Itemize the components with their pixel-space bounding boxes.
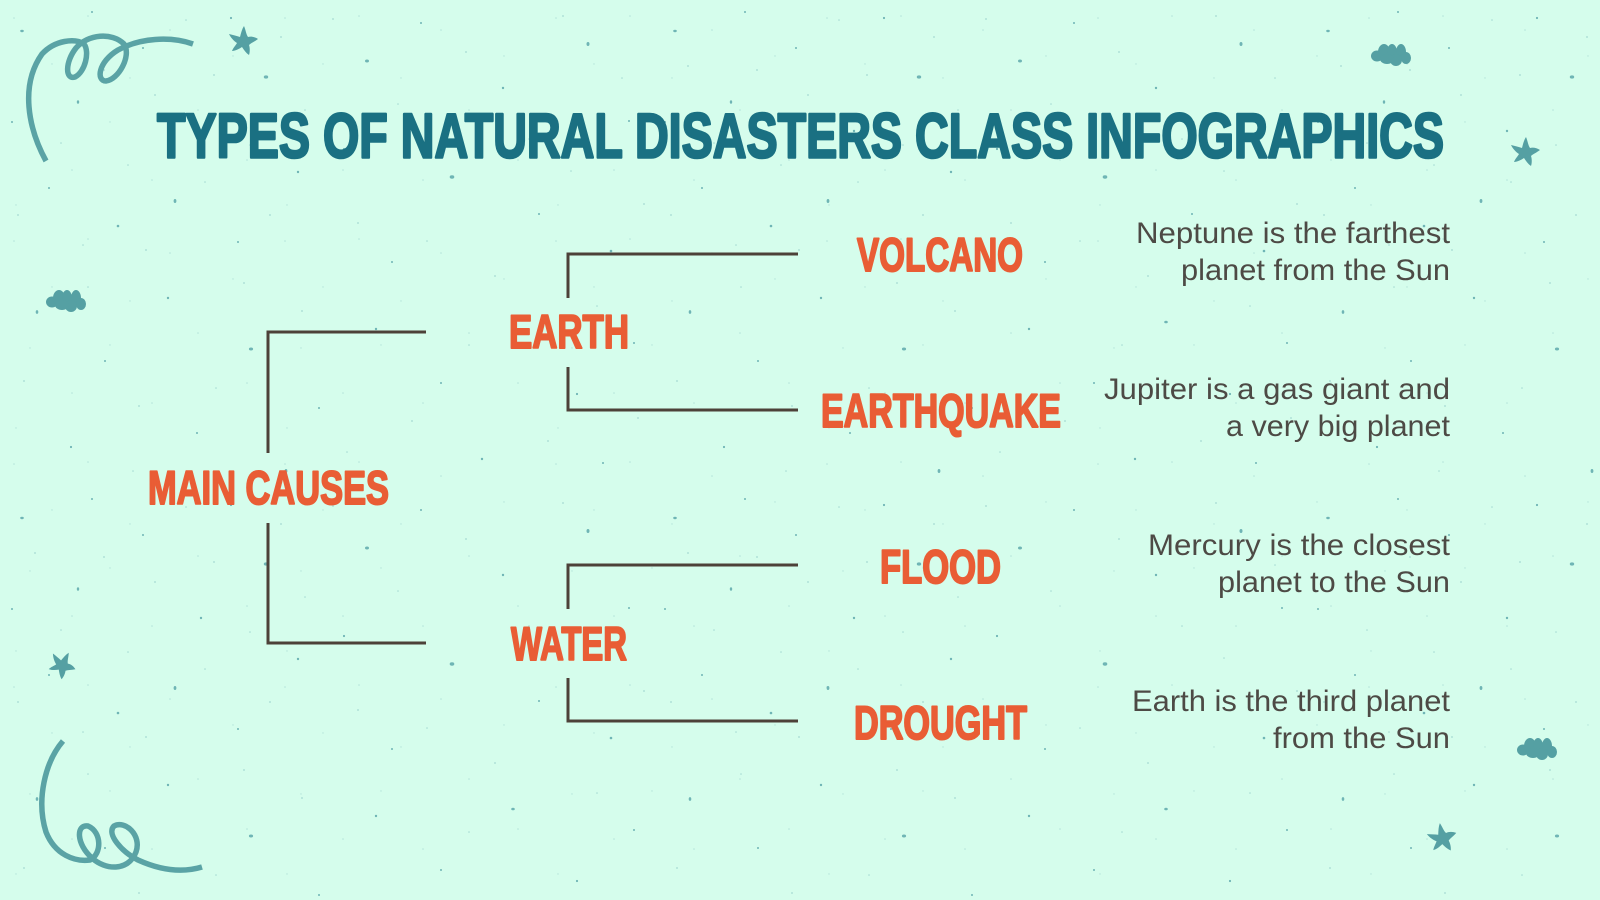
text block: earthquake description: [1104, 373, 1451, 443]
connector: water to drought: [568, 678, 798, 721]
icon: star bottom left: [45, 647, 81, 683]
label: volcano: VOLCANO: [857, 228, 1023, 281]
connector: main causes to earth: [268, 332, 426, 453]
label: water: WATER: [511, 617, 627, 670]
text block: flood description: Mercury is the closest: [1148, 529, 1451, 562]
text block: drought description: [1132, 685, 1451, 755]
connector: earth to earthquake: [568, 367, 798, 410]
text block: drought description: from the Sun: [1273, 722, 1450, 755]
icon: cloud left: [46, 290, 86, 312]
connector: earth to volcano: [568, 254, 798, 298]
label: flood: FLOOD: [880, 540, 1001, 593]
decoration: swirl bottom left: [42, 741, 202, 870]
text block: flood description: [1148, 529, 1451, 599]
icon: cloud top right: [1371, 44, 1411, 66]
label: main causes: MAIN CAUSES: [148, 461, 389, 514]
text block: drought description: Earth is the third planet: [1132, 685, 1451, 718]
connector: main causes to water: [268, 523, 426, 643]
text block: flood description: planet to the Sun: [1218, 566, 1450, 599]
icon: star bottom right: [1425, 820, 1460, 855]
label: earth: EARTH: [509, 305, 629, 358]
icon: cloud bottom right: [1517, 738, 1557, 760]
connector: water to flood: [568, 565, 798, 609]
decoration: swirl top left: [29, 36, 193, 161]
icon: star top left: [229, 26, 258, 55]
text block: volcano description: planet from the Sun: [1181, 254, 1450, 287]
text block: earthquake description: a very big planet: [1226, 410, 1451, 443]
text block: volcano description: Neptune is the farthest: [1136, 217, 1451, 250]
tree diagram: [148, 228, 1061, 749]
icon: star right: [1511, 137, 1540, 166]
label: drought: DROUGHT: [854, 696, 1027, 749]
text block: earthquake description: Jupiter is a gas giant and: [1104, 373, 1450, 406]
text block: volcano description: [1136, 217, 1451, 287]
label: earthquake: EARTHQUAKE: [821, 384, 1061, 437]
